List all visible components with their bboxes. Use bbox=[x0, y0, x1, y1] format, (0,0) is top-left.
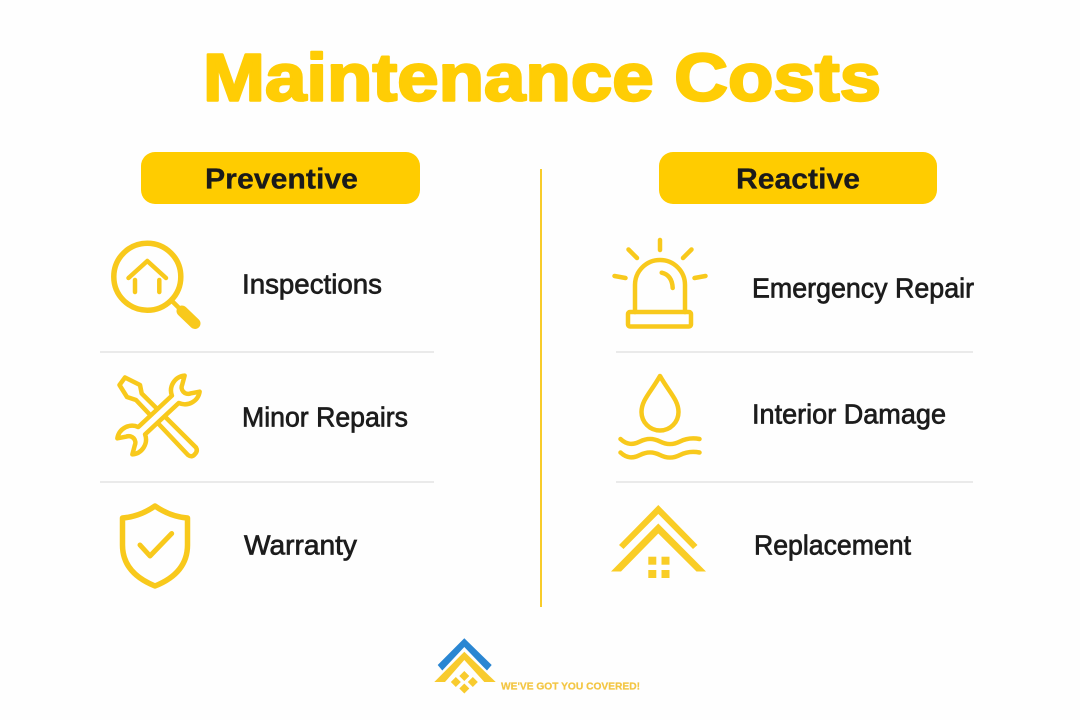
heading: preventive: Preventive bbox=[205, 164, 358, 196]
logo bbox=[434, 638, 640, 694]
logo mark: blue roof bbox=[438, 638, 492, 670]
logo tagline: WE'VE GOT YOU COVERED! bbox=[501, 680, 640, 692]
label: replacement: Replacement bbox=[754, 530, 911, 560]
heading: reactive bbox=[659, 152, 937, 204]
icon: house roof bbox=[611, 505, 706, 578]
icon: shield with check bbox=[122, 506, 188, 586]
label: warranty: Warranty bbox=[244, 530, 357, 560]
icon: magnifier with house bbox=[114, 243, 195, 324]
icon: crossed screwdriver and wrench bbox=[115, 373, 202, 457]
logo mark: diamonds bbox=[451, 671, 478, 694]
label: inspections: Inspections bbox=[242, 268, 382, 300]
label: minor repairs: Minor Repairs bbox=[242, 402, 408, 432]
logo mark: yellow roof bbox=[434, 652, 496, 682]
center divider bbox=[540, 169, 542, 607]
label: interior damage: Interior Damage bbox=[752, 398, 946, 430]
panel: reactive bbox=[611, 152, 974, 578]
icon: emergency siren bbox=[614, 240, 706, 326]
label: emergency repair: Emergency Repair bbox=[752, 272, 974, 304]
icon: water drop and waves bbox=[620, 376, 700, 458]
panel: preventive bbox=[100, 152, 434, 586]
title: Maintenance Costs bbox=[203, 40, 881, 116]
heading: preventive bbox=[141, 152, 420, 204]
heading: reactive: Reactive bbox=[736, 164, 860, 196]
